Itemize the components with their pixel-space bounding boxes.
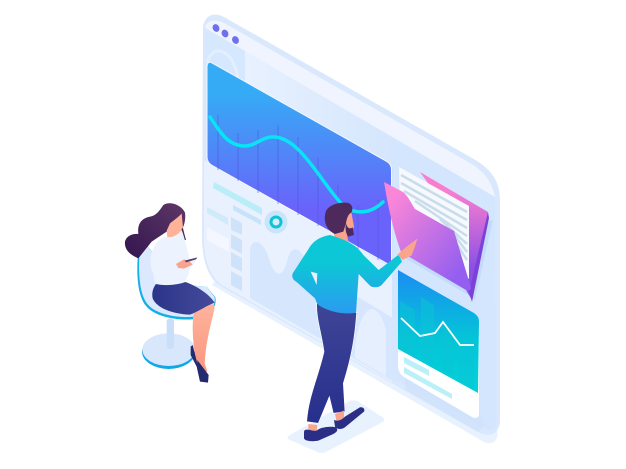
hand and phone bbox=[176, 259, 193, 269]
mini bars bbox=[400, 297, 474, 390]
hand bbox=[397, 239, 417, 260]
skirt bbox=[152, 282, 215, 315]
legs bbox=[193, 304, 215, 373]
trousers bbox=[307, 303, 357, 423]
folder papers bbox=[399, 167, 469, 279]
folder shadow bbox=[405, 220, 493, 299]
skewed list bars bbox=[207, 182, 262, 291]
neck bbox=[333, 228, 348, 242]
panel: mini chart card bbox=[398, 270, 485, 432]
hair bbox=[125, 203, 185, 258]
white trend line bbox=[401, 318, 474, 345]
man pointing bbox=[287, 203, 417, 453]
hair strand bbox=[181, 227, 186, 240]
icon: donut gauge bbox=[264, 210, 288, 234]
window title bar bbox=[205, 21, 495, 197]
panel: browser window board bbox=[202, 15, 500, 443]
arm notch bbox=[311, 272, 317, 285]
sweater and arms bbox=[292, 235, 402, 313]
folder back dark edge bbox=[469, 212, 489, 302]
panel: folder bbox=[384, 167, 493, 302]
face and neck bbox=[167, 213, 184, 237]
floor shadow bbox=[287, 400, 384, 453]
folder back bbox=[420, 172, 488, 300]
window control dots bbox=[211, 23, 240, 45]
panel: main line chart bbox=[207, 62, 392, 266]
chair base bbox=[142, 318, 195, 369]
folder front flap bbox=[384, 182, 471, 291]
hair and beard bbox=[325, 203, 354, 237]
ankles and shoes bbox=[308, 424, 317, 432]
card text bars bbox=[404, 357, 429, 376]
woman on chair bbox=[125, 203, 216, 383]
sweater bbox=[150, 230, 196, 285]
cyan trend curve bbox=[210, 117, 383, 212]
wave area chart bbox=[250, 242, 396, 383]
chair seat and back bbox=[137, 243, 216, 320]
lower left content area bbox=[204, 160, 392, 382]
chart grid lines bbox=[218, 115, 378, 260]
shoes bbox=[191, 345, 209, 383]
face bbox=[340, 208, 354, 236]
sidebar arc bbox=[207, 51, 238, 78]
